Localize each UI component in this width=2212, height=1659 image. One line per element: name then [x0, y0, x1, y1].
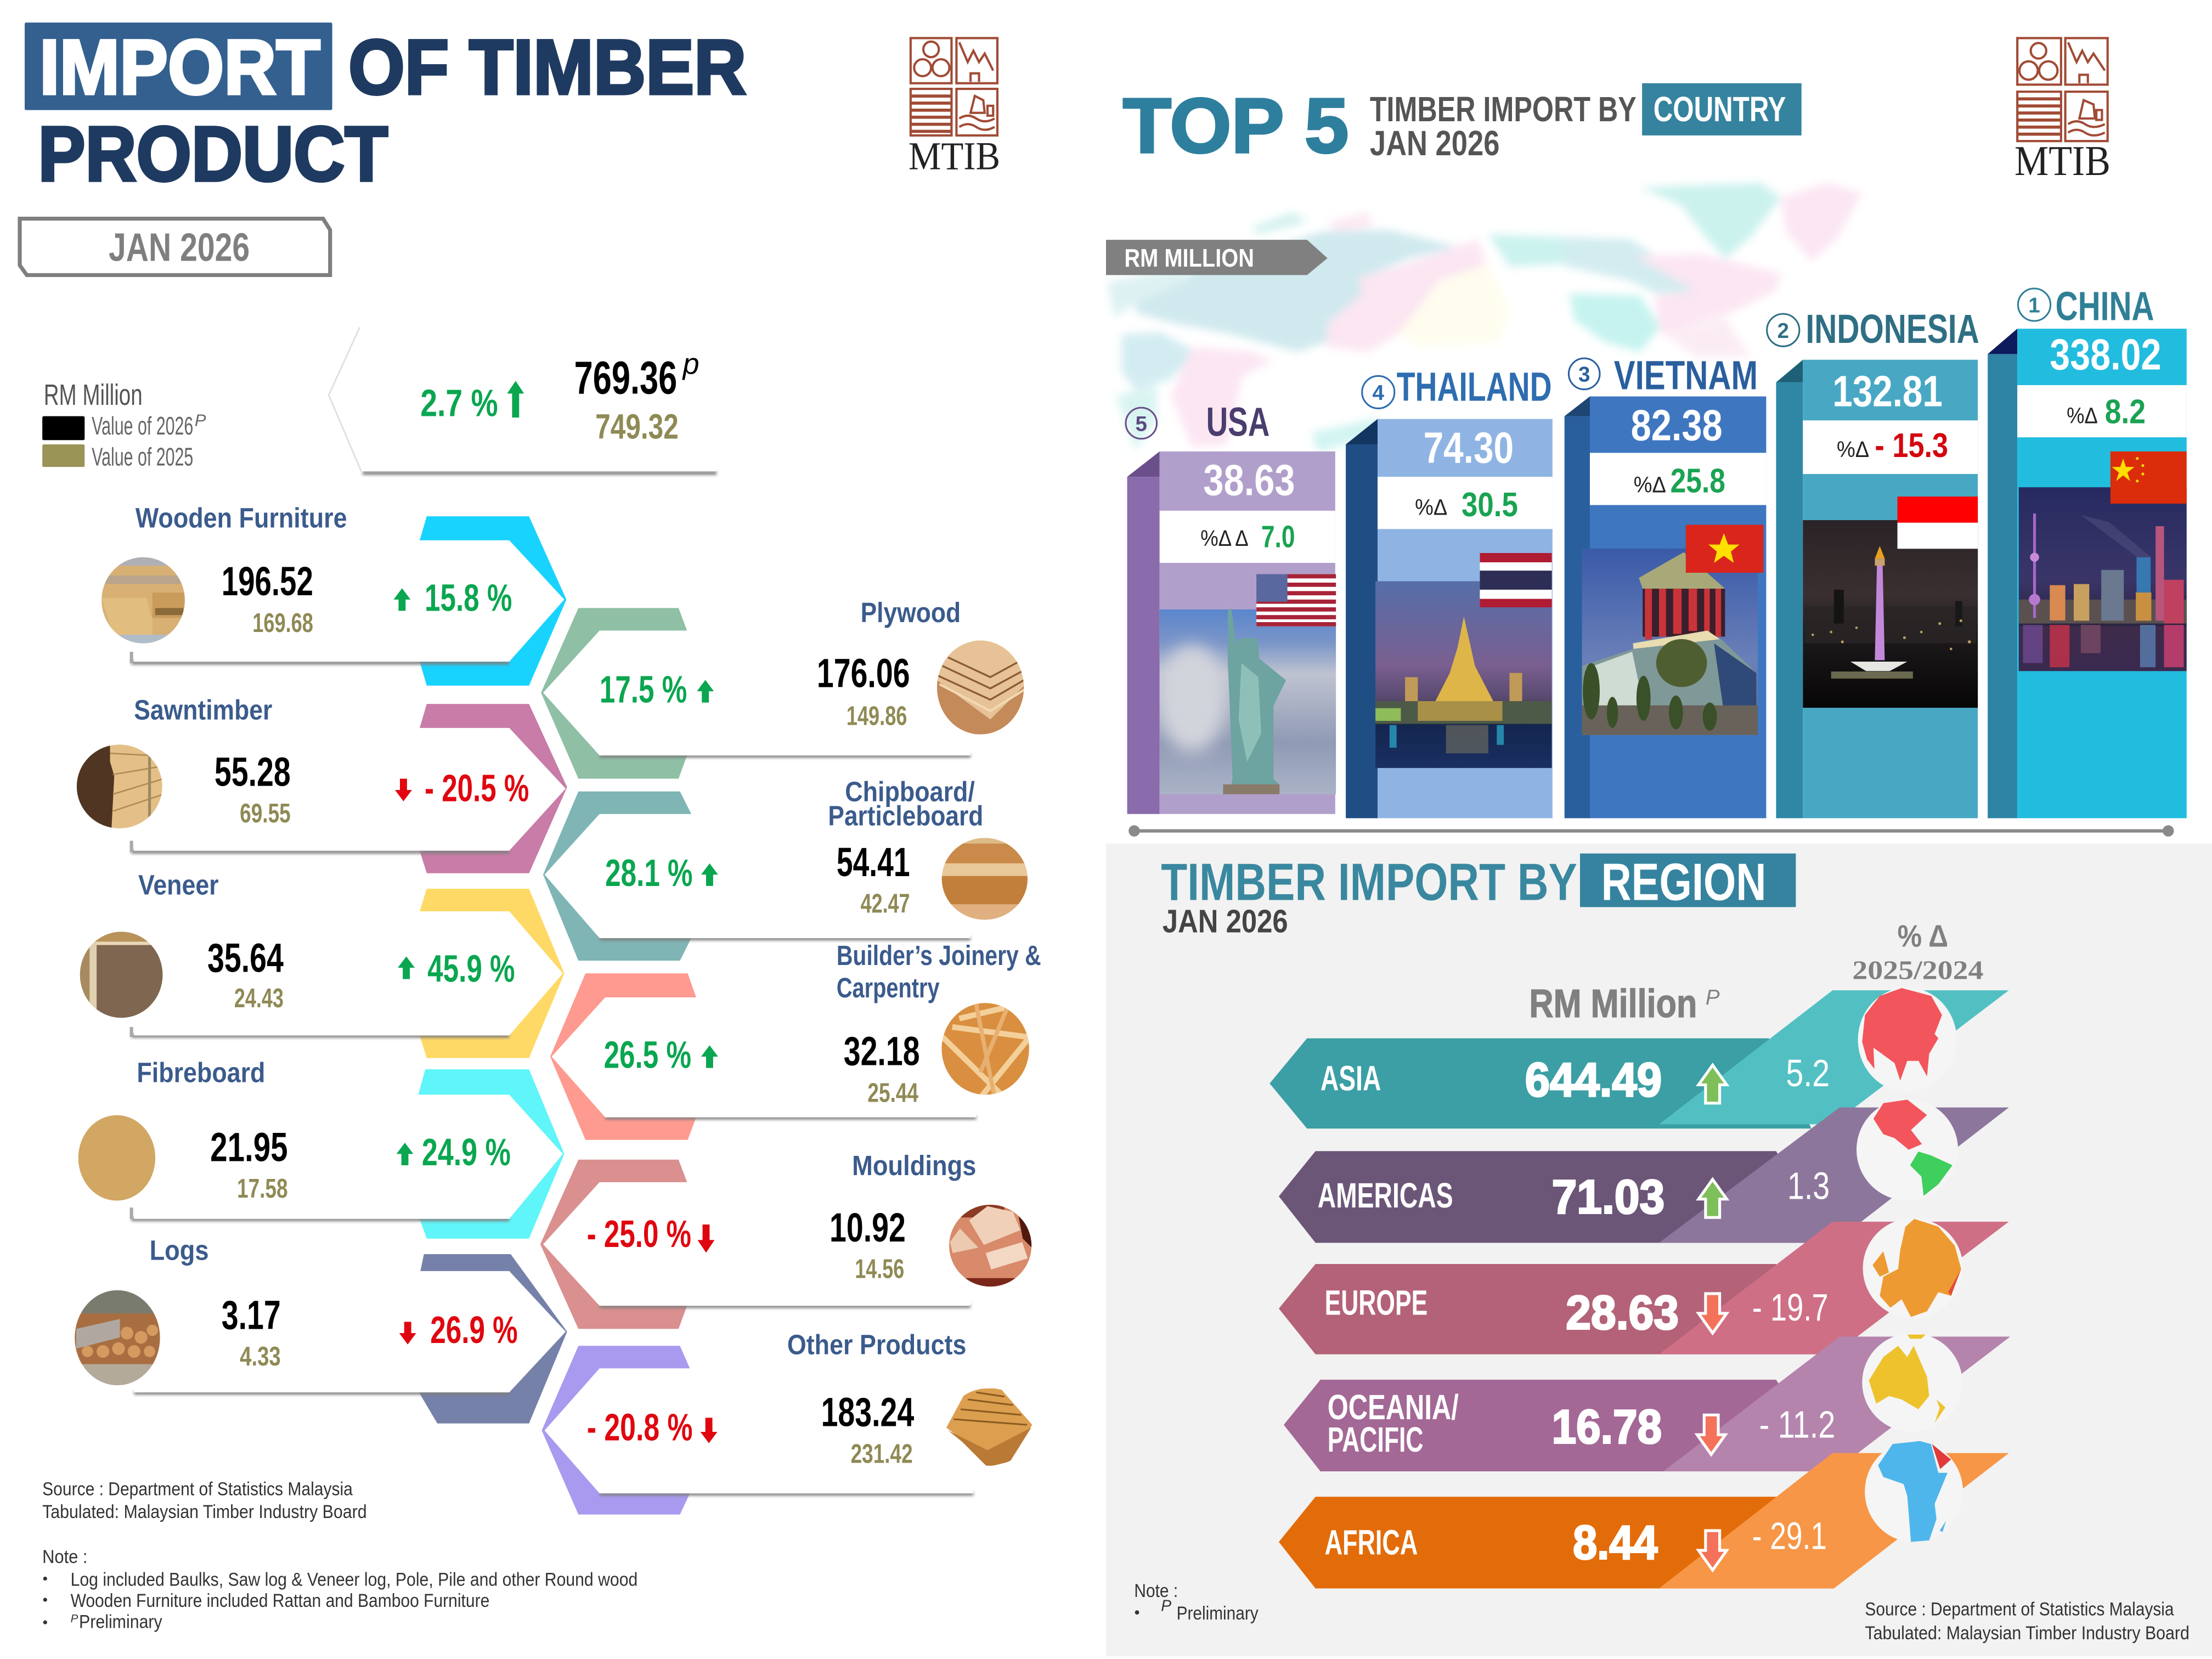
source note right [1865, 1599, 2190, 1644]
ribbon: Europe: 28.63 [1566, 1285, 1679, 1339]
item: Chipboard / Particleboard: Particleboard [828, 799, 983, 831]
bar: Vietnam: 82.38 [1631, 400, 1723, 449]
item: Wooden Furniture: 169.68 [252, 608, 313, 638]
ribbon: Oceania / Pacific: 16.78 [1552, 1400, 1662, 1454]
icon: plywood photo [936, 640, 1024, 735]
flag: Vietnam [1686, 525, 1763, 573]
bar: USA: %Δ Δ [1200, 526, 1249, 551]
item: Builder's Joinery and Carpentry: 32.18 [844, 1028, 920, 1074]
item: Other Products: 183.24 [821, 1389, 915, 1435]
label: USA: 5 [1136, 413, 1147, 436]
item: Veneer: 24.43 [234, 984, 284, 1013]
legend: Value of 2025 [92, 443, 193, 471]
panel: top 5 by country [1106, 38, 2187, 837]
bar: Indonesia: - 15.3 [1875, 427, 1948, 465]
heading: top 5: TOP 5 [1123, 82, 1348, 169]
bar: Vietnam: %Δ [1634, 472, 1666, 497]
label: Thailand [1362, 363, 1552, 409]
item: Plywood: 149.86 [847, 702, 907, 731]
title: OF TIMBER [348, 24, 746, 110]
total summary [329, 328, 748, 475]
source note left: Tabulated: Malaysian Timber Industry Board [42, 1502, 367, 1522]
item: Plywood: 176.06 [817, 650, 910, 696]
item: Fibreboard: Fibreboard [137, 1056, 265, 1088]
bar: Vietnam: 25.8 [1671, 462, 1725, 500]
globe: Asia [1858, 988, 1957, 1092]
ribbon: Europe [1279, 1218, 2009, 1355]
label: China [2018, 283, 2154, 329]
icon: wooden furniture photo [101, 557, 185, 644]
item: Mouldings [540, 1149, 1032, 1329]
axis line [1128, 825, 2174, 837]
heading: top 5: COUNTRY [1654, 89, 1786, 129]
date badge: JAN 2026 [109, 226, 250, 270]
panel: import by region [1106, 844, 2212, 1656]
item: Veneer: Veneer [138, 868, 219, 900]
icon: joinery photo [941, 1002, 1031, 1098]
total summary: p [682, 347, 699, 380]
legend: P [195, 411, 206, 430]
item: Other Products: 231.42 [851, 1440, 913, 1469]
item: Chipboard / Particleboard: 28.1 % [605, 851, 693, 894]
item: Builder's Joinery and Carpentry: 25.44 [867, 1078, 918, 1108]
bar: Thailand [1346, 363, 1553, 818]
logo: MTIB left: MTIB [909, 134, 1000, 178]
item: Wooden Furniture: Wooden Furniture [136, 502, 347, 534]
label: Vietnam: 3 [1578, 363, 1590, 387]
item: Logs: 4.33 [240, 1342, 281, 1372]
item: Logs: Logs [150, 1234, 209, 1266]
note: preliminary: Preliminary [1177, 1603, 1259, 1624]
item: Other Products: Other Products [787, 1329, 966, 1361]
notes left: Preliminary [79, 1611, 162, 1632]
heading: by region: JAN 2026 [1163, 903, 1288, 940]
item: Mouldings: Mouldings [852, 1149, 976, 1181]
label: Vietnam [1568, 352, 1758, 398]
bar: Indonesia: 132.81 [1832, 367, 1943, 416]
label: Indonesia [1767, 306, 1979, 352]
icon: chipboard photo [941, 838, 1029, 921]
item: Plywood: 17.5 % [600, 668, 687, 711]
logo: MTIB left [909, 38, 1000, 178]
label: Thailand: THAILAND [1397, 363, 1552, 409]
photo: Wat Arun [1375, 581, 1552, 768]
item: Veneer: 45.9 % [427, 947, 515, 990]
photo: Ho Chi Minh Mausoleum [1582, 549, 1758, 735]
globe: Oceania [1862, 1333, 1962, 1432]
label: China: 1 [2028, 294, 2040, 318]
flag: USA [1256, 574, 1336, 627]
note: preliminary: Note : [1134, 1581, 1178, 1601]
logo: MTIB right [2015, 38, 2111, 184]
label: Indonesia: INDONESIA [1805, 306, 1979, 352]
icon: pallet photo [946, 1388, 1032, 1467]
note: preliminary [1134, 1581, 1259, 1624]
notes left: Log included Baulks, Saw log & Veneer log, Pole, Pile and other Round wood [71, 1569, 637, 1590]
bar: Thailand: %Δ [1415, 495, 1447, 520]
legend: Value of 2026 [92, 411, 193, 440]
item: Logs [74, 1234, 567, 1424]
unit tag: RM million [1106, 240, 1328, 275]
item: Plywood: Plywood [861, 596, 961, 628]
icon: fibreboard photo [78, 1115, 155, 1201]
notes left [42, 1547, 637, 1632]
bar: USA: 38.63 [1203, 456, 1295, 505]
source note left: Source : Department of Statistics Malaysia [42, 1479, 353, 1500]
world map background [1108, 183, 1862, 452]
icon: mouldings photo [948, 1203, 1032, 1288]
panel: import of timber product [20, 22, 1041, 1632]
item: Chipboard / Particleboard: Chipboard/ [845, 776, 975, 808]
bar: China: 338.02 [2050, 330, 2161, 379]
column heading: percent change: % Δ [1898, 918, 1948, 953]
item: Fibreboard: 24.9 % [422, 1131, 511, 1173]
label: Thailand: 4 [1373, 381, 1385, 405]
ribbon: Americas: 1.3 [1787, 1165, 1830, 1207]
item: Sawntimber: - 20.5 % [425, 767, 529, 810]
ribbon: Americas [1279, 1099, 2009, 1243]
ribbon: Asia: ASIA [1321, 1059, 1381, 1098]
label: Indonesia: 2 [1778, 319, 1789, 343]
ribbon: Africa: - 29.1 [1752, 1514, 1827, 1557]
label: Vietnam: VIETNAM [1614, 352, 1758, 398]
bar: China: 8.2 [2105, 393, 2146, 431]
item: Builder's Joinery and Carpentry: Builder’s Joinery & [837, 939, 1041, 971]
icon: sawn timber photo [76, 743, 163, 830]
globe: Europe [1863, 1218, 1963, 1318]
label: USA [1126, 399, 1269, 445]
unit tag: RM million: RM MILLION [1124, 244, 1254, 272]
heading: by region [1161, 854, 1796, 940]
item: Plywood [541, 596, 1024, 778]
heading: top 5: TIMBER IMPORT BY [1370, 89, 1637, 129]
notes left: P [71, 1612, 78, 1625]
bar: Thailand: 74.30 [1424, 423, 1514, 472]
flag: Indonesia [1898, 496, 1978, 549]
photo: Shanghai skyline [2019, 487, 2187, 671]
item: Logs: 26.9 % [430, 1308, 518, 1351]
ribbon: Oceania / Pacific: PACIFIC [1328, 1420, 1424, 1459]
item: Fibreboard: 17.58 [237, 1174, 288, 1204]
source note left [42, 1479, 367, 1522]
icon: logs photo [74, 1289, 161, 1385]
item: Chipboard / Particleboard: 54.41 [837, 839, 910, 885]
ribbon: Africa [1279, 1441, 2009, 1588]
column heading: RM million: RM Million [1529, 982, 1697, 1026]
item: Builder's Joinery and Carpentry: Carpentry [837, 972, 940, 1003]
item: Sawntimber: 69.55 [240, 799, 291, 828]
bar: Vietnam [1565, 352, 1766, 818]
title [25, 22, 746, 197]
column heading: percent change [1852, 918, 1983, 985]
column heading: RM million: P [1706, 986, 1720, 1009]
ribbon: Asia: 644.49 [1525, 1053, 1662, 1107]
item: Wooden Furniture: 15.8 % [425, 576, 512, 619]
item: Logs: 3.17 [222, 1291, 281, 1338]
ribbon: Americas: 71.03 [1552, 1170, 1664, 1223]
item: Sawntimber [76, 693, 567, 873]
item: Veneer [79, 868, 565, 1058]
ribbon: Europe: EUROPE [1325, 1283, 1427, 1323]
item: Builder's Joinery and Carpentry [550, 939, 1041, 1140]
item: Wooden Furniture: 196.52 [222, 558, 313, 604]
item: Fibreboard: 21.95 [210, 1124, 288, 1170]
photo: statue of liberty [1158, 609, 1336, 794]
item: Other Products: - 20.8 % [587, 1406, 693, 1448]
item: Chipboard / Particleboard: 42.47 [861, 889, 910, 919]
notes left: Note : [42, 1547, 87, 1567]
ribbon: Europe: - 19.7 [1752, 1286, 1829, 1329]
item: Wooden Furniture [99, 502, 566, 686]
title: IMPORT [40, 24, 320, 110]
heading: top 5 [1123, 82, 1802, 169]
bar: USA [1126, 399, 1336, 814]
globe: Americas [1857, 1099, 1958, 1200]
title: PRODUCT [38, 110, 388, 197]
bar: USA: 7.0 [1261, 520, 1295, 554]
heading: by region: REGION [1601, 854, 1766, 912]
total summary: 769.36 [574, 351, 677, 403]
note: preliminary: P [1161, 1597, 1171, 1615]
logo: MTIB right: MTIB [2015, 137, 2111, 184]
label: China: CHINA [2056, 283, 2154, 329]
item: Sawntimber: Sawntimber [134, 693, 272, 725]
ribbon: Oceania / Pacific: OCEANIA/ [1328, 1387, 1459, 1427]
notes left: Wooden Furniture included Rattan and Bamboo Furniture [71, 1590, 489, 1611]
ribbon: Oceania / Pacific: - 11.2 [1759, 1403, 1835, 1446]
icon: veneer photo [79, 931, 163, 1020]
ribbon: Asia: 5.2 [1786, 1052, 1830, 1094]
item: Veneer: 35.64 [207, 935, 284, 981]
ribbon: Africa: 8.44 [1573, 1515, 1658, 1569]
item: Mouldings: 14.56 [855, 1255, 904, 1284]
total summary: 749.32 [595, 407, 679, 447]
bar: Indonesia: %Δ [1837, 437, 1869, 462]
globe: Africa [1865, 1441, 1963, 1542]
item: Mouldings: 10.92 [830, 1204, 906, 1250]
total summary: 2.7 % [420, 382, 498, 425]
bar: Thailand: 30.5 [1462, 486, 1518, 524]
label: USA: USA [1206, 399, 1269, 445]
heading: top 5: JAN 2026 [1370, 123, 1499, 163]
item: Builder's Joinery and Carpentry: 26.5 % [604, 1034, 691, 1076]
item: Fibreboard [78, 1056, 565, 1239]
bar: Indonesia [1767, 306, 1979, 818]
flag: China [2111, 452, 2187, 504]
legend [42, 379, 206, 471]
item: Mouldings: - 25.0 % [587, 1212, 691, 1255]
item: Sawntimber: 55.28 [215, 748, 291, 794]
heading: by region: TIMBER IMPORT BY [1161, 854, 1577, 912]
ribbon: Americas: AMERICAS [1318, 1176, 1453, 1215]
photo: Monas Jakarta [1803, 520, 1978, 708]
flag: Thailand [1480, 553, 1552, 607]
bar: China [1988, 283, 2187, 818]
ribbon: Africa: AFRICA [1325, 1523, 1418, 1562]
bar: China: %Δ [2067, 403, 2098, 428]
item: Chipboard / Particleboard [543, 776, 1029, 961]
legend: RM Million [44, 379, 143, 411]
column heading: percent change: 2025/2024 [1852, 955, 1983, 985]
item: Other Products [541, 1329, 1032, 1515]
ribbon: Asia [1269, 988, 2009, 1128]
ribbon: Oceania / Pacific [1284, 1333, 2010, 1471]
date badge [20, 219, 330, 275]
